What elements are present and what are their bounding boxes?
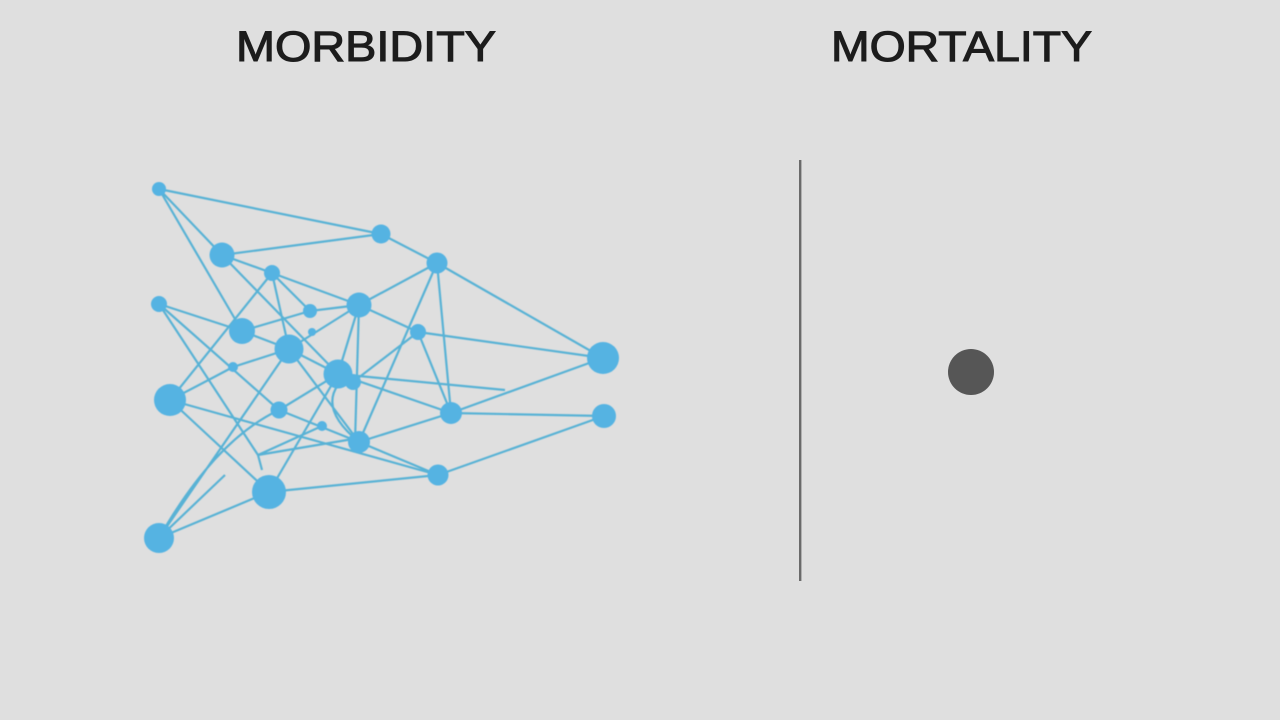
divider (799, 160, 801, 581)
network diagram (144, 182, 619, 553)
network links (159, 189, 604, 538)
mortality dot (948, 349, 994, 395)
title: mortality: MORTALITY (831, 23, 1092, 71)
network nodes (144, 182, 619, 553)
title: morbidity: MORBIDITY (236, 23, 496, 71)
